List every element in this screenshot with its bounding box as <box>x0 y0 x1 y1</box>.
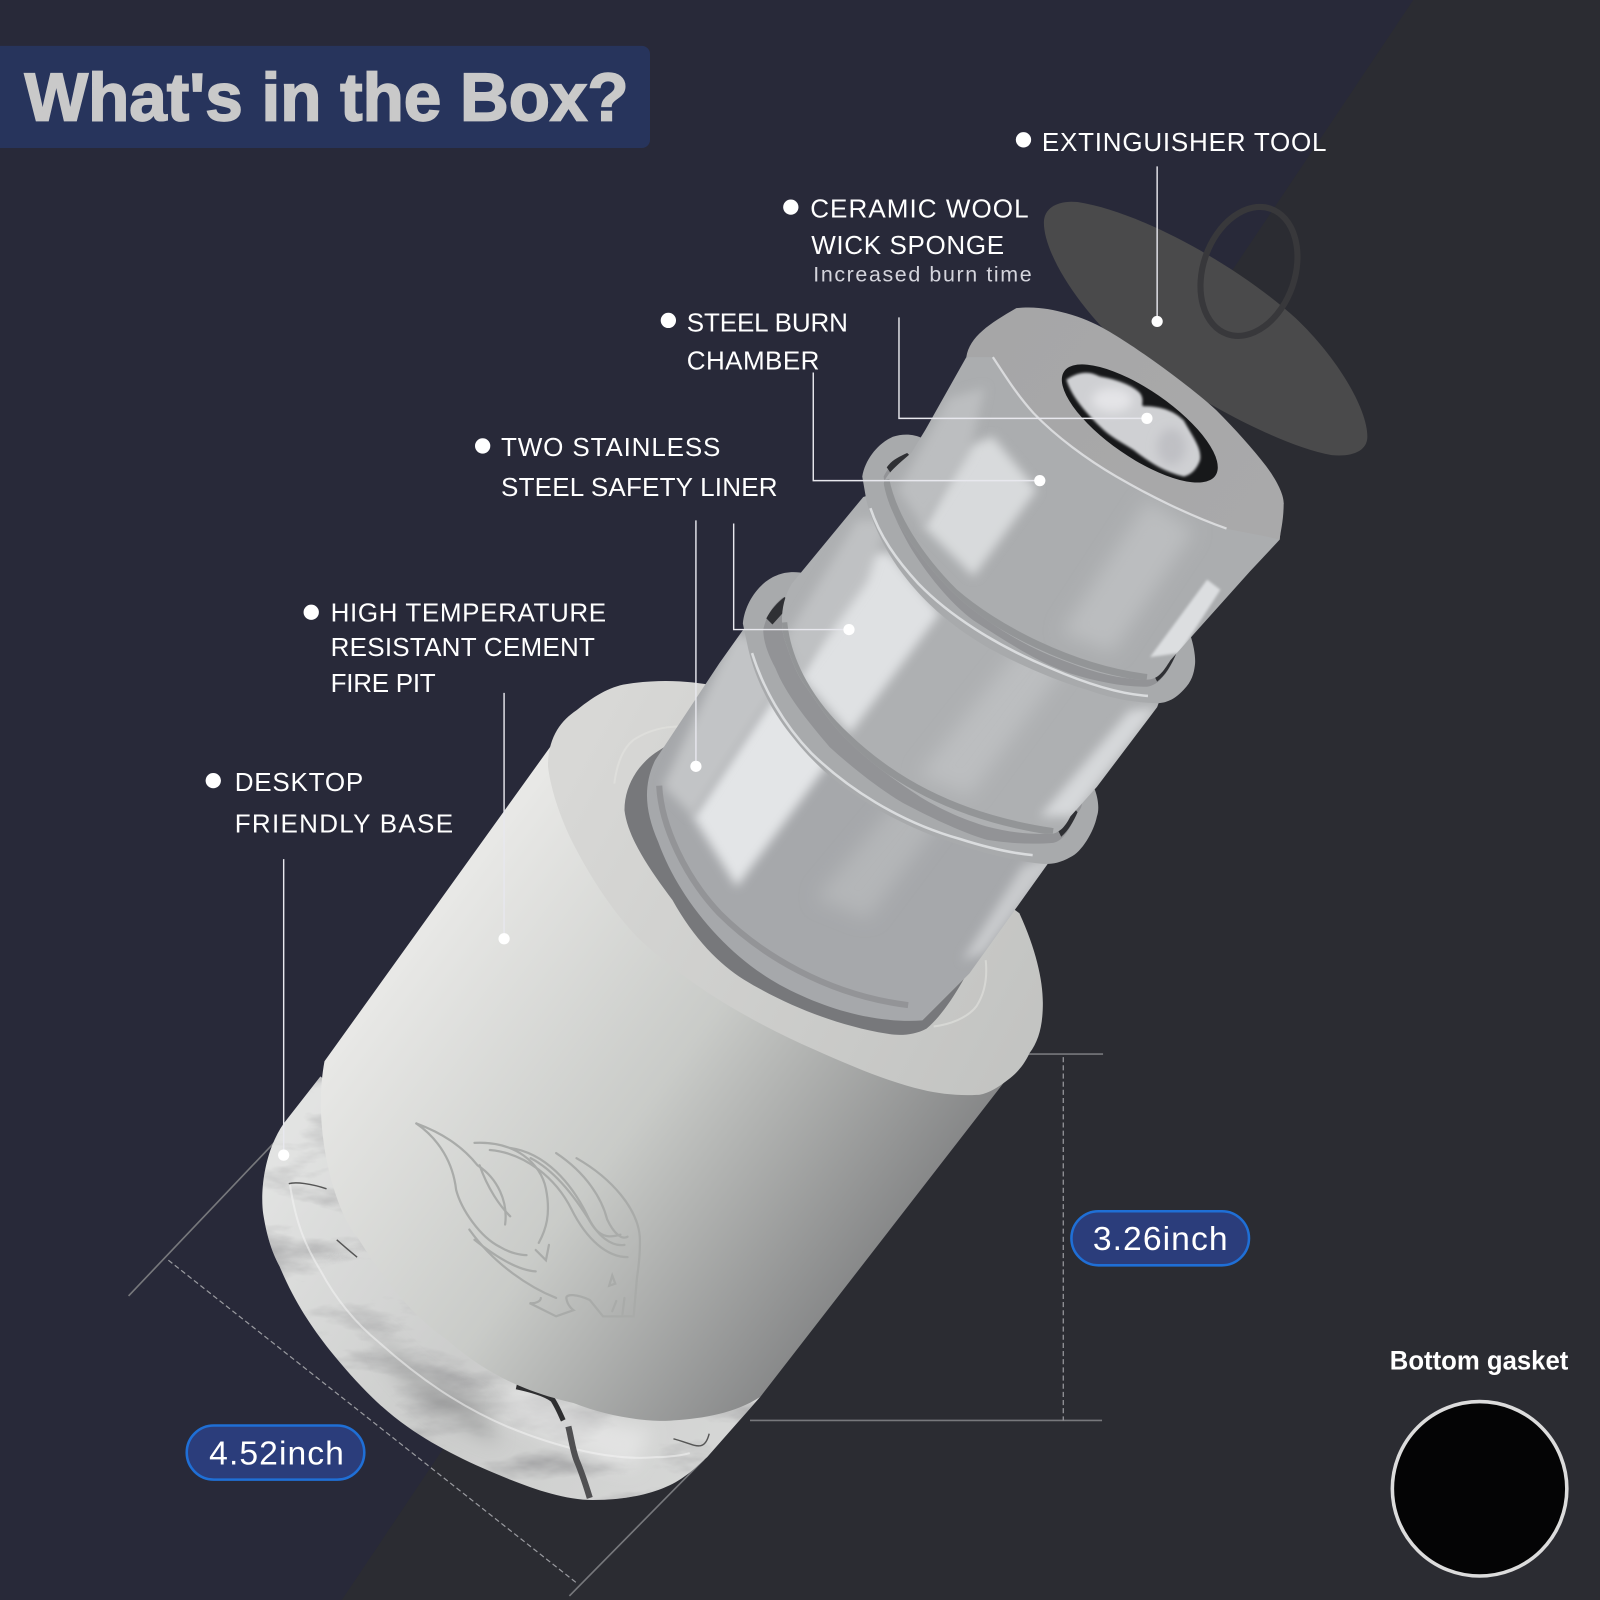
embossed flame logo <box>416 1123 640 1316</box>
liner opening <box>624 714 980 1035</box>
gasket label: Bottom gasket <box>1390 1345 1569 1375</box>
callout: ceramic wool wick sponge: Increased burn time <box>813 263 1032 287</box>
callout: extinguisher tool <box>1016 127 1327 327</box>
callout: two stainless steel safety liner: STEEL SAFETY LINER <box>501 472 778 502</box>
bottom safety liner <box>647 628 1048 1021</box>
chamber top face <box>966 308 1284 540</box>
extinguisher tool plate <box>1044 194 1367 455</box>
cement top face <box>548 681 1043 1095</box>
callout: two stainless steel safety liner: TWO STAINLESS <box>501 432 720 462</box>
callout: high temperature resistant cement fire pit: FIRE PIT <box>331 668 436 698</box>
callout: desktop friendly base: DESKTOP <box>235 767 363 797</box>
callout: ceramic wool wick sponge <box>783 193 1153 424</box>
ceramic wool sponge <box>1066 373 1200 477</box>
callout: steel burn chamber <box>661 308 1045 486</box>
bottom gasket <box>1390 1345 1569 1576</box>
callout: steel burn chamber: STEEL BURN <box>687 308 848 338</box>
lower liner flange ring <box>743 572 1098 864</box>
title banner <box>0 46 650 148</box>
upper flange ring <box>862 435 1195 703</box>
gasket disc <box>1392 1402 1567 1576</box>
callout: steel burn chamber: CHAMBER <box>687 345 819 375</box>
callout: high temperature resistant cement fire pit: HIGH TEMPERATURE <box>331 597 606 627</box>
extinguisher ring <box>1184 194 1314 349</box>
badge: width 4.52inch <box>187 1426 364 1480</box>
callout: high temperature resistant cement fire pit <box>304 597 606 944</box>
steel burn chamber <box>884 308 1284 680</box>
badge: height 3.26inch: 3.26inch <box>1093 1221 1228 1258</box>
callout: desktop friendly base: FRIENDLY BASE <box>235 809 453 839</box>
marble desktop base <box>262 1076 760 1500</box>
callout: two stainless steel safety liner <box>475 432 855 772</box>
callout: high temperature resistant cement fire pit: RESISTANT CEMENT <box>331 632 595 662</box>
callout: ceramic wool wick sponge: WICK SPONGE <box>811 230 1004 260</box>
dimension lines <box>129 1054 1103 1596</box>
callout: extinguisher tool: EXTINGUISHER TOOL <box>1042 127 1327 157</box>
wick hole <box>1045 344 1235 503</box>
badge: height 3.26inch <box>1071 1211 1249 1265</box>
middle safety liner <box>782 480 1173 834</box>
cement fire pit body <box>321 710 1020 1421</box>
title: What's in the Box? <box>24 60 629 135</box>
badge: width 4.52inch: 4.52inch <box>209 1435 344 1472</box>
callout: ceramic wool wick sponge: CERAMIC WOOL <box>810 193 1029 223</box>
callout: desktop friendly base <box>206 767 453 1161</box>
